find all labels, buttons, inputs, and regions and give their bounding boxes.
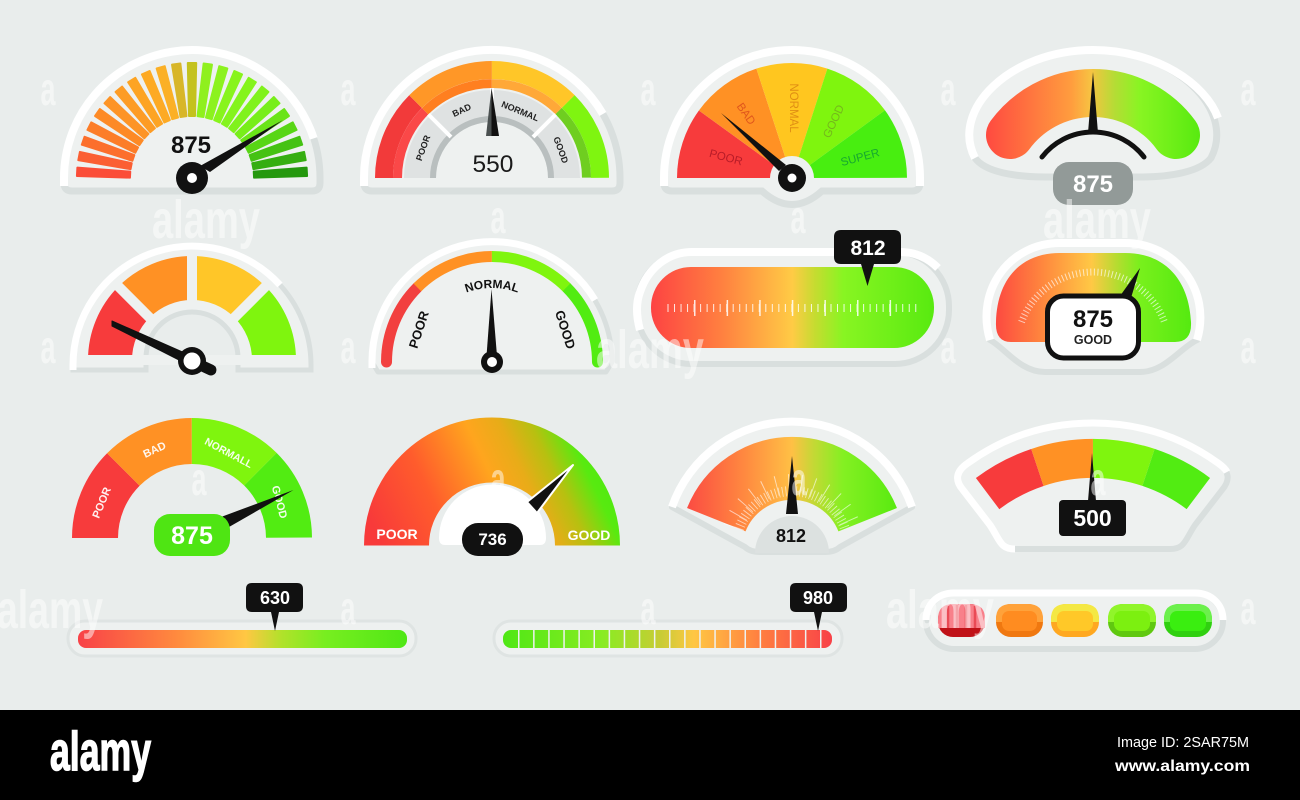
needle — [1088, 453, 1096, 501]
needle — [527, 465, 573, 513]
value: 550 — [473, 151, 513, 178]
footer logo: alamy — [50, 720, 151, 782]
watermarks — [0, 63, 1256, 640]
labels — [91, 436, 289, 520]
band labels — [414, 99, 570, 165]
needle — [176, 120, 283, 194]
labels: GOOD — [552, 308, 579, 351]
value box: 500 — [1073, 505, 1112, 531]
light: green — [1164, 604, 1212, 637]
gauge: fan with ticks 812 — [672, 422, 912, 553]
light: light green — [1108, 604, 1156, 637]
band — [95, 441, 289, 538]
image id and url: Image ID: 2SAR75M — [1117, 735, 1249, 751]
labels: POOR — [376, 526, 418, 542]
watermarks: a — [40, 321, 56, 373]
band labels: GOOD — [551, 135, 570, 165]
gauge: gradient semicircle 736 — [376, 450, 610, 556]
frame — [494, 621, 842, 656]
segments — [988, 458, 1198, 494]
frame — [958, 423, 1228, 549]
frame — [637, 252, 949, 364]
watermarks: a — [340, 321, 356, 373]
wedge labels: GOOD — [821, 103, 847, 140]
light: orange — [996, 604, 1043, 637]
dome — [996, 253, 1191, 342]
needle — [221, 490, 294, 527]
callout: 812 — [850, 237, 886, 260]
value box — [1059, 500, 1126, 536]
value pill: 875 — [171, 522, 213, 550]
gauge: segmented bars 875 — [64, 50, 320, 194]
watermarks: a — [340, 582, 356, 634]
band labels: BAD — [451, 101, 473, 119]
gauge: four segments with pill — [91, 436, 294, 556]
light: yellow — [1051, 604, 1099, 637]
thin arc — [386, 256, 598, 362]
gradient bar — [651, 267, 934, 348]
needle — [112, 321, 211, 375]
gauge: gradient arc with grey pill — [969, 50, 1218, 205]
value pill — [462, 523, 523, 556]
indicator lights panel — [926, 593, 1223, 649]
watermarks: a — [1090, 453, 1106, 505]
linear bar: 980 segmented — [494, 583, 847, 656]
gauge: two-tone band 550 — [364, 50, 620, 191]
frame — [969, 50, 1218, 177]
labels: GOOD — [568, 527, 610, 543]
wedge labels: POOR — [708, 148, 744, 168]
segments — [80, 250, 304, 365]
hub — [439, 484, 546, 545]
watermarks: alamy — [1043, 190, 1151, 250]
gauge: thin arc with labels — [368, 238, 612, 374]
labels: BAD — [141, 440, 168, 461]
gauge: wide bar 812 — [637, 230, 949, 364]
needle — [1042, 72, 1144, 157]
watermarks: alamy — [886, 580, 994, 640]
frame — [73, 246, 311, 370]
watermarks: a — [490, 453, 506, 505]
watermarks: a — [40, 63, 56, 115]
bar — [503, 630, 832, 648]
value box — [1048, 296, 1138, 358]
value pill — [1053, 162, 1133, 205]
labels — [376, 526, 610, 543]
frame — [664, 50, 920, 204]
frame — [364, 50, 620, 191]
callout: 980 — [803, 588, 833, 608]
bar — [78, 630, 407, 648]
labels: POOR — [406, 309, 432, 350]
frame — [68, 621, 416, 656]
callout — [790, 583, 847, 631]
wedge labels: BAD — [734, 101, 757, 127]
frame — [64, 50, 320, 191]
band labels: NORMAL — [500, 99, 541, 123]
watermarks: a — [640, 582, 656, 634]
needle — [486, 88, 499, 136]
watermarks: alamy — [0, 580, 103, 640]
frame — [372, 242, 612, 372]
tick scale — [668, 304, 918, 312]
light: red — [938, 604, 985, 637]
linear bar: 630 — [68, 583, 416, 656]
labels: NORMALL — [202, 436, 255, 471]
wedge labels: NORMAL — [787, 83, 799, 133]
footer strip — [0, 710, 1300, 800]
labels — [406, 280, 579, 351]
watermarks: a — [1240, 63, 1256, 115]
needle — [1120, 268, 1140, 298]
band labels: POOR — [414, 133, 433, 162]
value box: GOOD — [1074, 333, 1112, 347]
coloured band — [384, 70, 600, 178]
frame — [672, 422, 912, 552]
value pill: 875 — [1073, 171, 1113, 198]
watermarks: a — [340, 63, 356, 115]
labels: GOOD — [269, 484, 289, 520]
callout: 630 — [260, 588, 290, 608]
watermarks: a — [490, 191, 506, 243]
labels: NORMAL — [464, 280, 518, 292]
watermarks: a — [1240, 321, 1256, 373]
grey label band — [403, 88, 581, 178]
labels: POOR — [91, 486, 114, 520]
watermarks: a — [192, 453, 207, 505]
gauge: five wedges — [664, 50, 920, 204]
ticks — [1022, 272, 1164, 322]
gauge: wing with box 500 — [958, 423, 1228, 549]
watermarks: a — [792, 453, 807, 505]
image id and url — [1114, 735, 1250, 775]
hub — [755, 516, 829, 553]
value: 875 — [171, 132, 211, 159]
watermarks: a — [940, 63, 956, 115]
gauge: gradient dome with value box — [986, 243, 1200, 372]
needle — [481, 289, 503, 373]
value pill: 736 — [478, 530, 507, 549]
watermarks: a — [940, 321, 956, 373]
watermarks: alamy — [152, 190, 260, 250]
gauge: four blocks with notch — [73, 246, 311, 375]
wedge labels — [708, 83, 881, 169]
watermarks: a — [1240, 582, 1256, 634]
needle and hub — [721, 113, 814, 200]
value pill — [154, 514, 230, 556]
wedge labels: SUPER — [840, 147, 881, 169]
gradient arc — [1010, 93, 1176, 135]
radial colour bars — [77, 63, 307, 179]
watermarks: a — [790, 191, 806, 243]
frame — [986, 243, 1200, 372]
image id and url: www.alamy.com — [1114, 758, 1250, 775]
gradient fan — [716, 468, 868, 520]
cell gaps — [518, 630, 822, 648]
watermarks: a — [640, 63, 656, 115]
needle — [786, 456, 798, 514]
frame — [926, 593, 1223, 649]
callout — [246, 583, 303, 631]
value box: 875 — [1073, 306, 1113, 333]
value: 812 — [776, 526, 806, 546]
wedges — [734, 120, 850, 178]
ticks — [733, 484, 851, 529]
watermarks: alamy — [596, 320, 704, 380]
gradient band — [396, 450, 588, 546]
callout — [834, 230, 901, 286]
